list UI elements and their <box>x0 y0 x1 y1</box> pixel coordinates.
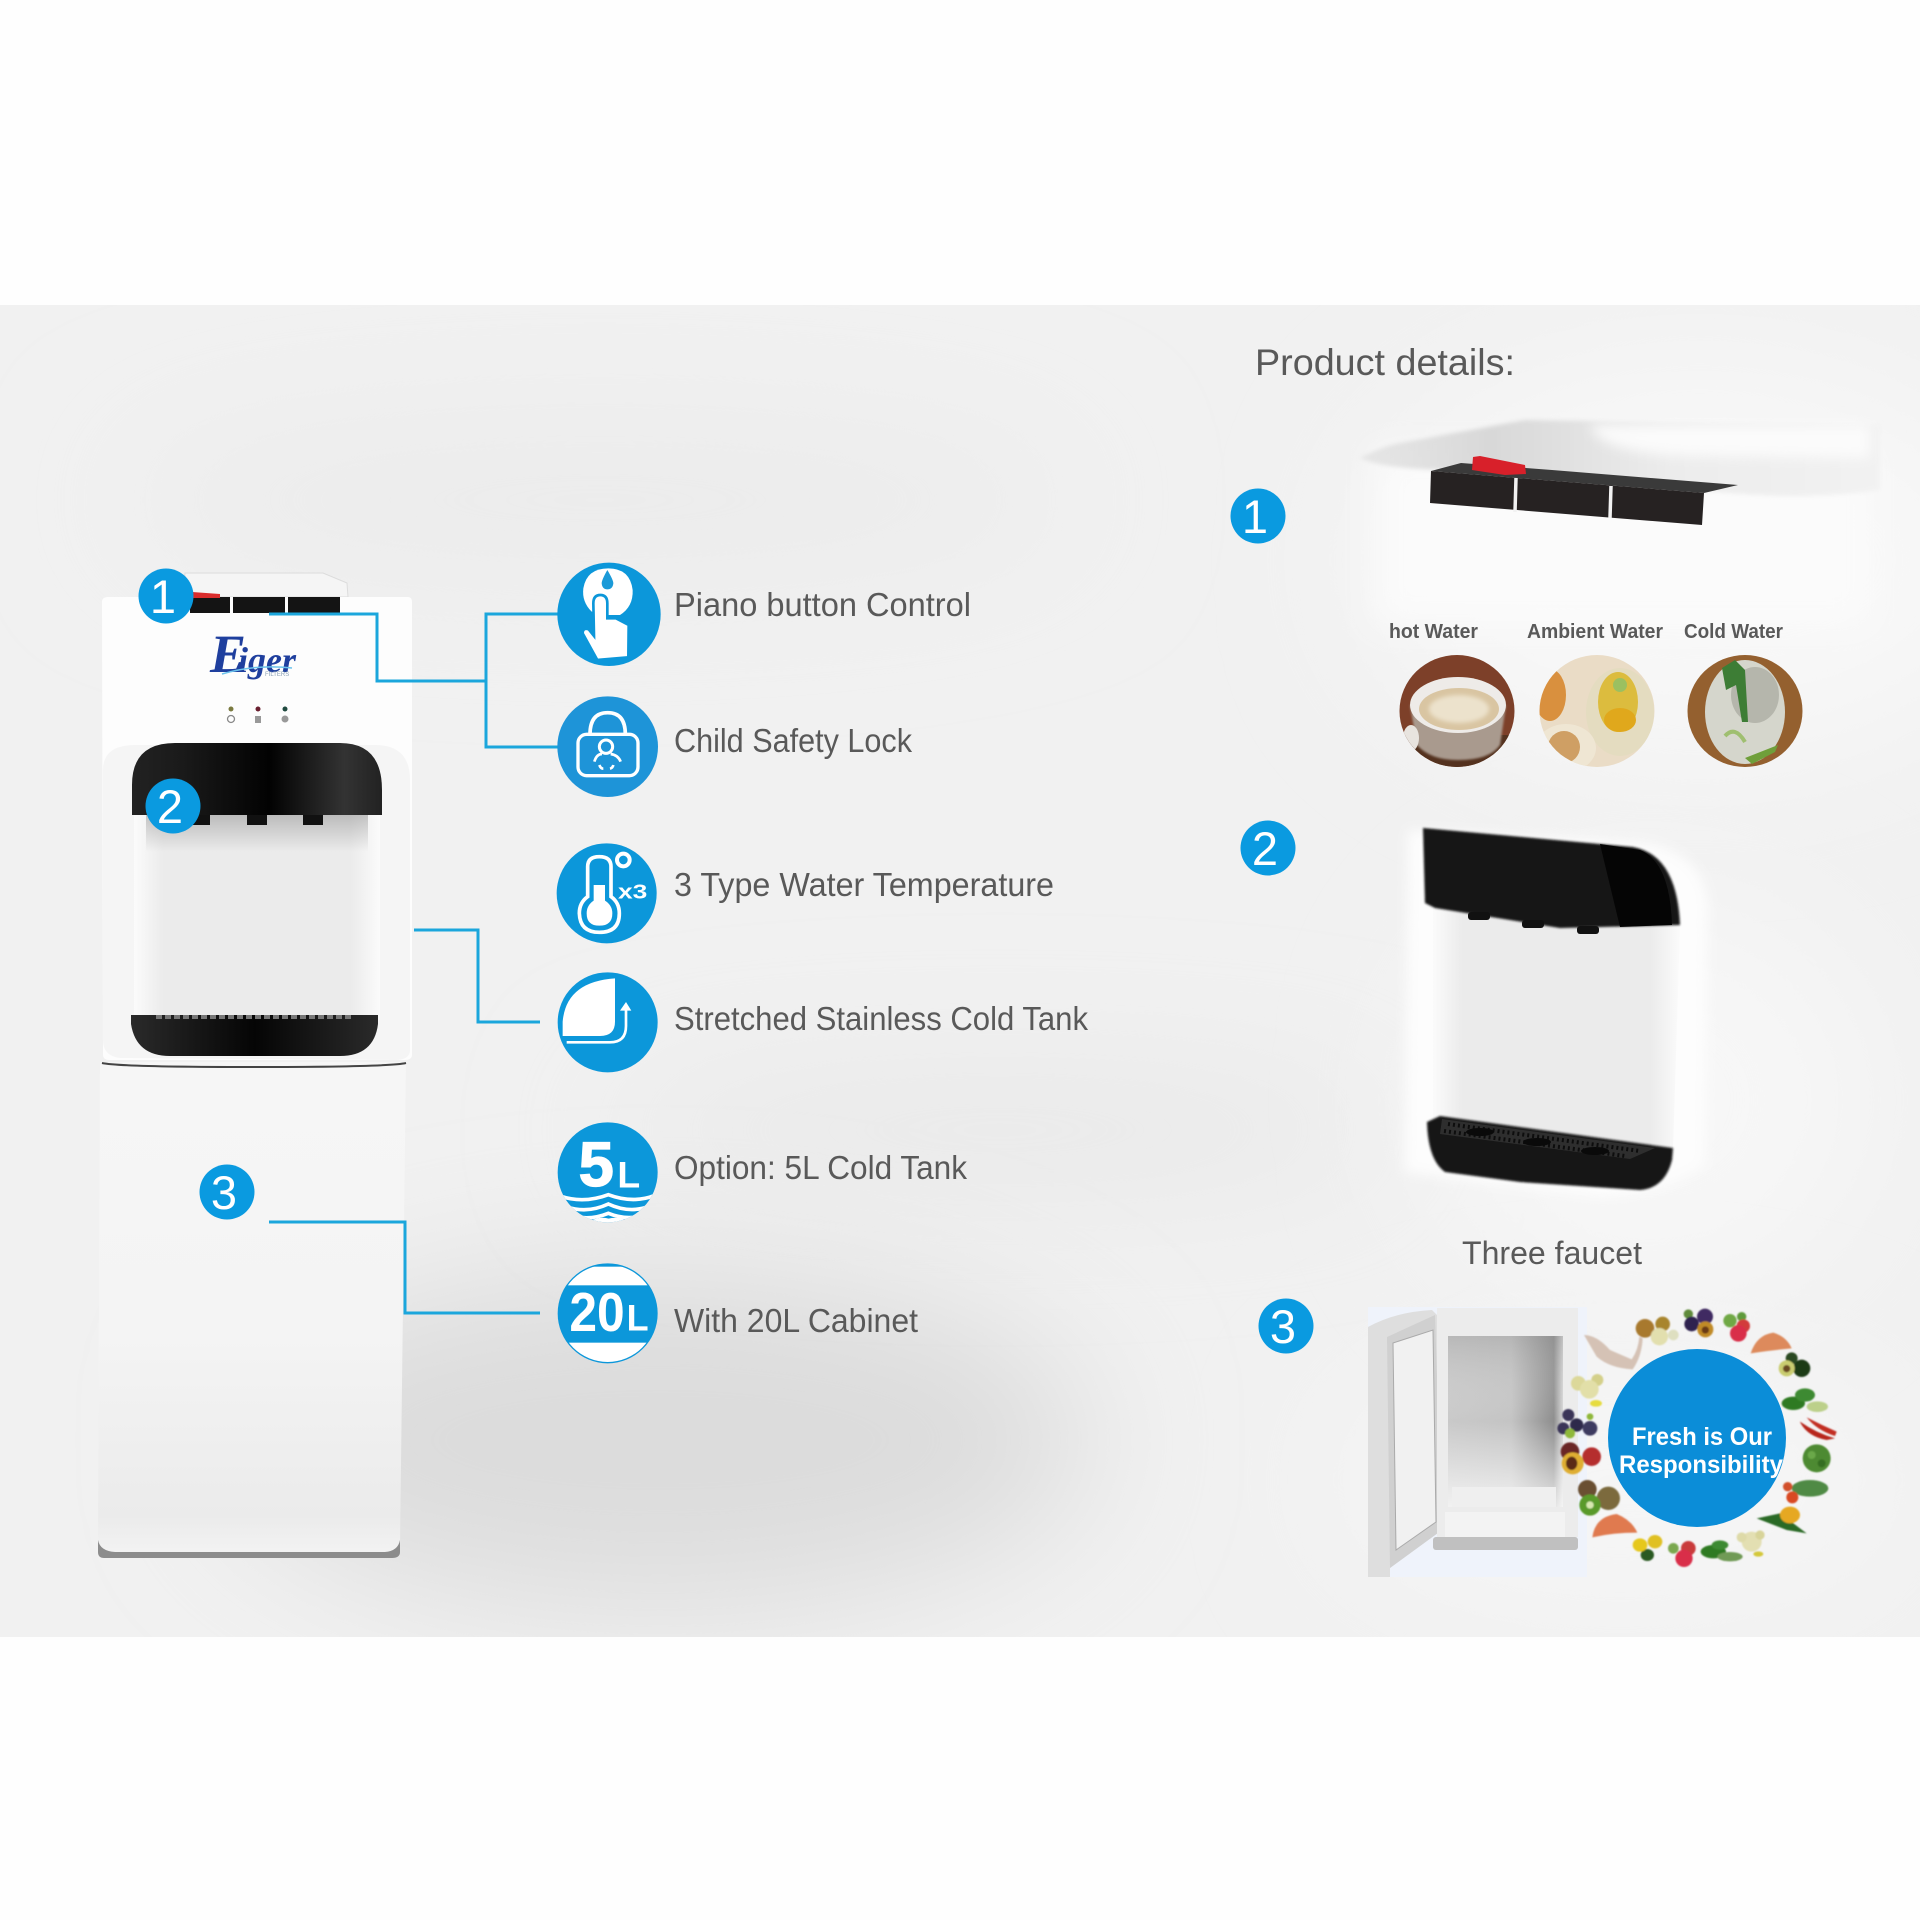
grapes <box>1557 1409 1597 1438</box>
strawberry 2 <box>1668 1541 1696 1567</box>
kiwi <box>1578 1480 1620 1516</box>
lettuce <box>1803 1444 1831 1472</box>
tomato <box>1783 1480 1828 1503</box>
salmon <box>1751 1333 1792 1353</box>
number badge 1 left <box>138 568 194 624</box>
icon: child lock <box>557 696 658 797</box>
number badge 3 left: 3 <box>211 1166 237 1219</box>
cabinet <box>98 1062 406 1556</box>
water type labels: Ambient Water <box>1527 621 1663 643</box>
onion 2 <box>1737 1530 1765 1557</box>
logo: Eiger: Eiger <box>209 624 297 684</box>
feature labels: Child Safety Lock <box>674 722 912 759</box>
feature labels <box>674 586 1088 1339</box>
piano buttons <box>190 592 340 613</box>
caption: three faucet: Three faucet <box>1462 1235 1642 1271</box>
logo: Eiger: FILTERS <box>265 672 289 678</box>
icon: piano button <box>557 563 661 666</box>
icon: 5L <box>558 1122 658 1224</box>
icon: 5L: 5 <box>579 1130 614 1200</box>
plum <box>1684 1309 1713 1337</box>
number badge 2 right <box>1240 820 1296 876</box>
heading: product details: Product details: <box>1255 342 1515 383</box>
top cap <box>183 573 348 597</box>
photo: ambient water tea <box>1540 655 1654 767</box>
detail 2: three faucet close-up <box>1405 828 1708 1197</box>
icon: thermometer: x3 <box>618 880 647 903</box>
water type labels: Cold Water <box>1684 621 1783 643</box>
number badge 3 right <box>1258 1298 1314 1354</box>
salmon 2 <box>1592 1514 1637 1537</box>
strawberry <box>1723 1312 1750 1342</box>
detail 3: open cabinet <box>1368 1307 1587 1577</box>
pepper <box>1757 1507 1807 1533</box>
number badge 1 left: 1 <box>150 570 176 623</box>
feature labels: Piano button Control <box>674 586 971 623</box>
icon: 20L: 20 <box>569 1281 625 1343</box>
connector lines <box>269 614 558 1313</box>
greens 2 <box>1701 1540 1743 1561</box>
lemon <box>1633 1535 1662 1561</box>
greens <box>1782 1388 1828 1412</box>
feature labels: Stretched Stainless Cold Tank <box>674 1000 1088 1037</box>
callout: fresh is our responsibility <box>1608 1349 1786 1527</box>
icon: thermometer <box>557 843 657 943</box>
icon: stretched tank <box>558 972 658 1072</box>
number badge 2 right: 2 <box>1252 822 1278 875</box>
callout: fresh is our responsibility: Fresh is Our <box>1632 1423 1772 1451</box>
avocado <box>1779 1352 1810 1377</box>
number badge 1 right: 1 <box>1242 490 1268 543</box>
number badge 3 right: 3 <box>1270 1300 1296 1353</box>
number badge 1 right <box>1230 488 1286 544</box>
food ring <box>1557 1309 1837 1567</box>
number badge 2 left <box>146 778 200 834</box>
feature labels: With 20L Cabinet <box>674 1302 918 1339</box>
black faucet housing <box>132 743 382 815</box>
callout: fresh is our responsibility: Responsibility <box>1619 1451 1783 1479</box>
dispensing niche <box>103 745 410 1060</box>
fish <box>1584 1335 1643 1369</box>
icon: 20L: L <box>627 1297 649 1338</box>
onions 3 <box>1571 1374 1603 1407</box>
onion <box>1636 1317 1679 1345</box>
faucets <box>190 815 323 825</box>
water type labels <box>1389 621 1783 643</box>
product: water dispenser <box>98 573 412 1558</box>
photo: hot water coffee <box>1400 655 1514 767</box>
icon: 20L <box>557 1263 660 1366</box>
detail 1: piano buttons close-up <box>1360 420 1880 625</box>
number badge 3 left <box>200 1164 254 1220</box>
feature labels: 3 Type Water Temperature <box>674 866 1054 903</box>
drip tray <box>131 1015 378 1056</box>
feature labels: Option: 5L Cold Tank <box>674 1149 967 1186</box>
water type labels: hot Water <box>1389 621 1478 643</box>
peach <box>1561 1442 1601 1474</box>
body upper <box>102 597 412 1060</box>
photo: cold water glass <box>1688 655 1802 767</box>
number badge 2 left: 2 <box>157 780 183 833</box>
background band <box>0 305 1920 1637</box>
icon: 5L: L <box>617 1153 640 1195</box>
indicator lights <box>228 706 288 723</box>
chilis <box>1800 1417 1837 1440</box>
